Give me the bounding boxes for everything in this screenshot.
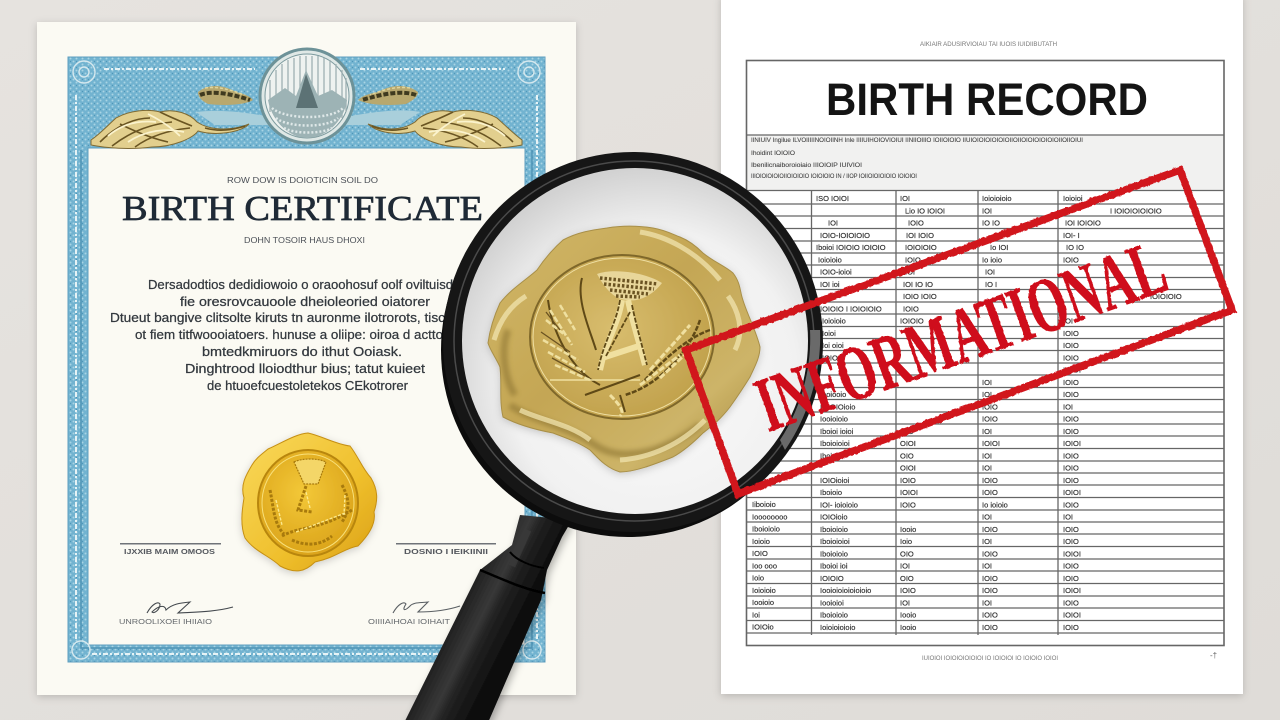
icon: magnifying glass [403, 152, 823, 720]
table column 4 text: IOIOI [982, 439, 1000, 448]
table column 5 text: IOIO [1063, 341, 1079, 350]
table column 5 text: IOIOIOIO [1150, 292, 1182, 301]
table column 3 text: OIOI [900, 464, 916, 472]
info block text: IIIOIOIOIOIOIIOIOIOIO IOIOIOIO IN / IIOP IOIIOIOIOIOIO IOIOIOI [751, 173, 917, 180]
table column 3 text: IOI IOIO [906, 231, 934, 240]
table column 2 text: Iboioio [820, 488, 842, 497]
table column 2 text: IOIOioio [820, 512, 848, 522]
guilloche border [68, 57, 545, 662]
table column 4 text: Ioioioioio [982, 194, 1012, 203]
table column 5 text: IOIOI [1063, 366, 1081, 374]
info block text: IINIUIV Ingilue ILVOIIIIINOIOIINH Inle IIIIUIHOIOVIOIUI IINIIOIIIO IOIIOIOIO IIUIOIOIOIOIOIOIIOIIOIOIOIOIOIOIIOIIOIUI [751, 137, 1083, 144]
table column 3 text: IOIOI [900, 488, 918, 497]
table column 1 text: Ioo ooo [752, 561, 777, 570]
seal engraved emblem [541, 271, 710, 416]
certificate body text: ot fiem titfwoooiatoers. hunuse a oliipe: oiroa d actto [135, 327, 443, 342]
table column 3 text: IOIO [900, 586, 916, 595]
certificate body text: Dtueut bangive clitsolte kiruts tn auronme ilotrorots, tisc [110, 310, 446, 325]
table column 2 text: Iooioioioioioioio [820, 586, 871, 595]
table column 4 text: IOIO [982, 574, 998, 583]
table column 5 text: IOIO [1063, 525, 1079, 534]
panel: birth record [721, 0, 1243, 694]
signature line right [396, 543, 496, 556]
table column 3 text: IOIO [908, 218, 924, 228]
table column 5 text: IOIO [1063, 464, 1079, 472]
table column 4 text: IOIO [982, 610, 998, 620]
icon: magnified gold seal [488, 226, 760, 472]
table column 4 text: IOIO [982, 476, 998, 485]
table column 1 text: IOIOio [752, 622, 774, 632]
table column 4 text: IOI [985, 268, 995, 276]
table column 2 text: IOIOioioi [820, 476, 850, 485]
table column 2 text: Ioioioio [822, 316, 846, 326]
table column 5 text: IOI IOIOIO [1065, 218, 1101, 228]
table column 5 text: IOIOI [1063, 610, 1081, 620]
table column 2 text: IOIOIO I IOIOIOIO [820, 304, 882, 313]
table column 4 text: IOIO [982, 525, 998, 534]
ornament: pale ribbon [196, 110, 420, 125]
table column 3 text: OIO [900, 549, 914, 558]
table column 3 text: OIO [900, 574, 914, 583]
corner rosettes [72, 61, 541, 659]
table column 1 text: Iooioio [752, 598, 774, 607]
ornament: gold scroll upper right [358, 86, 418, 105]
table column 5 text: IOIO [1063, 476, 1079, 485]
certificate body text: Dinghtrood lloiodthur bius; tatut kuieet [185, 361, 425, 376]
info block text: Ihoidint IOIOIO [751, 150, 795, 157]
table column 5 text: IOIOI [1063, 488, 1081, 497]
record footer caption: IUIOIOI IOIOIOIOIOIOI IO IOIOIOI IO IOIOIO IOIOI [922, 656, 1058, 662]
table column 2 text: Iooiooio [820, 390, 846, 399]
table column 4 text: IOIO [982, 586, 998, 595]
table column 3 text: OIO [900, 451, 914, 460]
subheading line: DOHN TOSOIR HAUS DHOXI [244, 236, 365, 245]
record top caption: AIKIAIR ADUSIRVIOIAU TAI IUOIS IUIDIIBUTATH [920, 42, 1057, 48]
info block text [751, 137, 1083, 180]
magnifier handle [403, 515, 572, 720]
stamp: informational [686, 170, 1232, 494]
table column 3 text: IOI [900, 194, 910, 203]
table column 5 text: IOIO [1063, 329, 1079, 338]
table column 4 text: IOI [982, 451, 992, 460]
border white dashes [76, 69, 537, 654]
table column 2 text: IOIOIO [820, 574, 844, 583]
table column 2 text: Ioioioio [818, 255, 842, 264]
table column 3 text: IOIOIO [900, 316, 924, 326]
icon: small gold wax seal [242, 433, 377, 571]
table column 2 text: Iboioioioi [820, 439, 850, 448]
title: birth record: BIRTH RECORD [826, 74, 1148, 125]
table column 5 text: IOI- I [1063, 231, 1080, 240]
table column 5 text: IOI [1063, 402, 1073, 411]
table column 3 text: OIOI [900, 439, 916, 448]
small heading line: ROW DOW IS DOIOTICIN SOIL DO [227, 176, 378, 185]
info block background [746, 135, 1224, 191]
table grid [746, 60, 1224, 646]
table column 2 text: IOI [828, 218, 838, 228]
ornament: gold scroll lower right [368, 110, 522, 148]
table column 4 text: IOI [982, 378, 992, 387]
table column 5 text: IOI [1063, 316, 1073, 326]
table column 4 text: Io ioio [982, 255, 1002, 264]
signature right [368, 602, 460, 626]
table column 5 text: IOIO [1063, 353, 1079, 362]
table column 3 text: IOIO [905, 255, 921, 264]
table column 2 text: Iboioi ioioi [820, 427, 854, 436]
table column 3 text: Iooio [900, 610, 916, 620]
table column 3 text: IOI [905, 268, 915, 276]
table column 4 text: IOIO [982, 402, 998, 411]
table column 5 text: IOIOI [1063, 439, 1081, 448]
table column 5 text: IOIO [1063, 574, 1079, 583]
table column 5 text: Ioioioi [1063, 194, 1083, 203]
table column 1 text: IOIO [752, 549, 768, 558]
table column 2 text: Iboioi [820, 451, 838, 460]
record paper [721, 0, 1243, 694]
signature left: UNROOLIXOEI IHIIAIO [119, 619, 213, 626]
signature line right: DOSNIO I IEIKIINII [404, 547, 488, 556]
table column 4 text: IOI [982, 390, 992, 399]
certificate body text: de htuoefcuestoletekos CEkotrorer [207, 378, 409, 393]
table column 2 text: Ioioi [822, 329, 836, 338]
seal inner disc [530, 255, 714, 419]
table column 5 text: IOIO [1063, 623, 1079, 632]
table column 3 text: IOIO IOIO [903, 292, 937, 301]
table column 5 text: IOIO [1063, 451, 1079, 460]
table column 4 text: IOI [982, 512, 992, 522]
table column 2 text: Iooioioio [820, 414, 848, 424]
ornament: gold scroll lower left [91, 110, 249, 148]
table column 4 text: IOIO [982, 488, 998, 497]
table column 2 text: Iooioioi [820, 598, 844, 607]
signature right: OIIIIAIHOAI IOIHAIT [368, 619, 451, 626]
certificate body text: bmtedkmiruors do ithut Ooiask. [202, 344, 402, 359]
table column 4 text: IO I [985, 280, 997, 289]
table column 2 text: Ioioioioioio [820, 623, 855, 632]
medallion [260, 49, 354, 143]
panel: birth certificate [37, 22, 576, 695]
magnifier rim [441, 152, 823, 537]
table column 3 text: OIO [900, 427, 914, 436]
table column 5 text: I IOIOIOIOIOIO [1110, 206, 1162, 215]
table column 2 text: IOIO-IOIOIOIO [820, 231, 870, 240]
table column 3 text: Ioio [900, 537, 912, 546]
certificate body text: Dersadodtios dedidiowoio o oraoohosuf oolf oviltuisd [148, 277, 453, 292]
table column 4 text: IO IO [982, 218, 1000, 228]
table column 1 text: Ioioioio [752, 586, 776, 595]
lens reflection highlight [780, 330, 820, 450]
table column 3 text: Iooio [900, 623, 916, 632]
table column 2 text: Iboioioioi [820, 537, 850, 546]
table column 4 text: IOIO [982, 623, 998, 632]
table column 4 text: IOI [982, 562, 992, 570]
table column 3 text: IOIO [900, 476, 916, 485]
table column 4 text: IOI [982, 427, 992, 436]
table column 4 text: IOI [982, 206, 992, 215]
record page mark: -† [1210, 651, 1217, 660]
table column 3 text: IOIO [903, 304, 919, 313]
signature line left [120, 543, 221, 556]
table column 5 text: IO IO [1066, 243, 1084, 252]
table column 3 text: IOI IO IO [903, 280, 933, 289]
signature line left: IJXXIB MAIM OMOOS [124, 547, 215, 556]
table column 2 text: ISO IOIOI [816, 194, 849, 203]
table column 2 text: IOI ioi [820, 280, 840, 289]
table column 1 text: Ioooooooo [752, 512, 787, 521]
table column 5 text: IOIO [1063, 427, 1079, 436]
table column 3 text: IOIO [900, 500, 916, 509]
table column 4 text: Io ioioio [982, 500, 1008, 509]
table column 5 text: IOIO [1063, 598, 1079, 607]
seal highlight folds [494, 232, 740, 460]
table column 2 text: Iboioioio [820, 549, 848, 558]
table column 5 text: IOIO [1063, 255, 1079, 264]
ornament: gold scroll upper left [198, 86, 253, 105]
info block text: Ibenilicnaiboroioiaio IIIOIOIP IUIVIOI [751, 162, 862, 169]
seal shaded folds [504, 330, 700, 454]
table column 1 text: Ioioio [752, 537, 770, 546]
table column 5 text: IOIOI [1063, 586, 1081, 595]
table column 4 text: IOI [982, 464, 992, 472]
stamp border [686, 170, 1232, 494]
table column 5 text: IOIO [1063, 562, 1079, 570]
table column 5 text: IOIO [1063, 537, 1079, 546]
table column 3 text: IOIOIOIO [905, 243, 937, 252]
table column 4 text: Io IOI [990, 243, 1008, 252]
table column 3 text: Iooio [900, 525, 916, 534]
table column 2 text: Iboioioio [820, 610, 848, 620]
signature left [119, 602, 233, 626]
table column 4 text: IOIO [982, 549, 998, 558]
border dark keyline [81, 150, 532, 648]
table column 3 text: Lio IO IOIOI [905, 206, 945, 215]
table column 1 text: Iiboioio [752, 500, 776, 509]
table column 2 text: Iboioi ioi [820, 562, 848, 570]
table column 4 text: IOI [982, 537, 992, 546]
certificate paper [37, 22, 576, 695]
table column 5 text: IOIO [1063, 390, 1079, 399]
title: birth certificate: BIRTH CERTIFICATE [122, 189, 483, 228]
table column 2 text: Iboioi IOIOIO IOIOIO [816, 243, 886, 252]
table column 5 text: IOIO [1063, 500, 1079, 509]
table column 2 text: Iboioioio [820, 525, 848, 534]
table column 5 text: IOIO [1063, 414, 1079, 424]
table column 1 text: Ioi [752, 610, 760, 619]
table column 2 text: IOIOIOioio [820, 402, 855, 411]
table column 5 text: IOIOI [1063, 549, 1081, 558]
table column 2 text: IOIO-ioioi [820, 268, 852, 276]
table column 3 text: IOI [900, 598, 910, 607]
certificate body text: fie oresrovcauoole dheioleoried oiatorer [180, 294, 431, 309]
table column 2 text: IOIO [822, 353, 838, 362]
table column 1 text: Iboioioio [752, 524, 780, 534]
table column 1 text: Ioio [752, 574, 764, 582]
table column 5 text: IOI [1063, 512, 1073, 522]
certificate body text [110, 277, 453, 393]
table column 5 text: IOIO [1063, 378, 1079, 387]
table column 2 text: IOI- ioioioio [820, 500, 858, 509]
table column 3 text: IOI [900, 562, 910, 570]
table column 4 text: IOIO [982, 414, 998, 424]
table column 4 text: IOI [982, 598, 992, 607]
magnifier lens [462, 168, 808, 514]
table column 2 text: Ioi oioi [822, 341, 844, 350]
